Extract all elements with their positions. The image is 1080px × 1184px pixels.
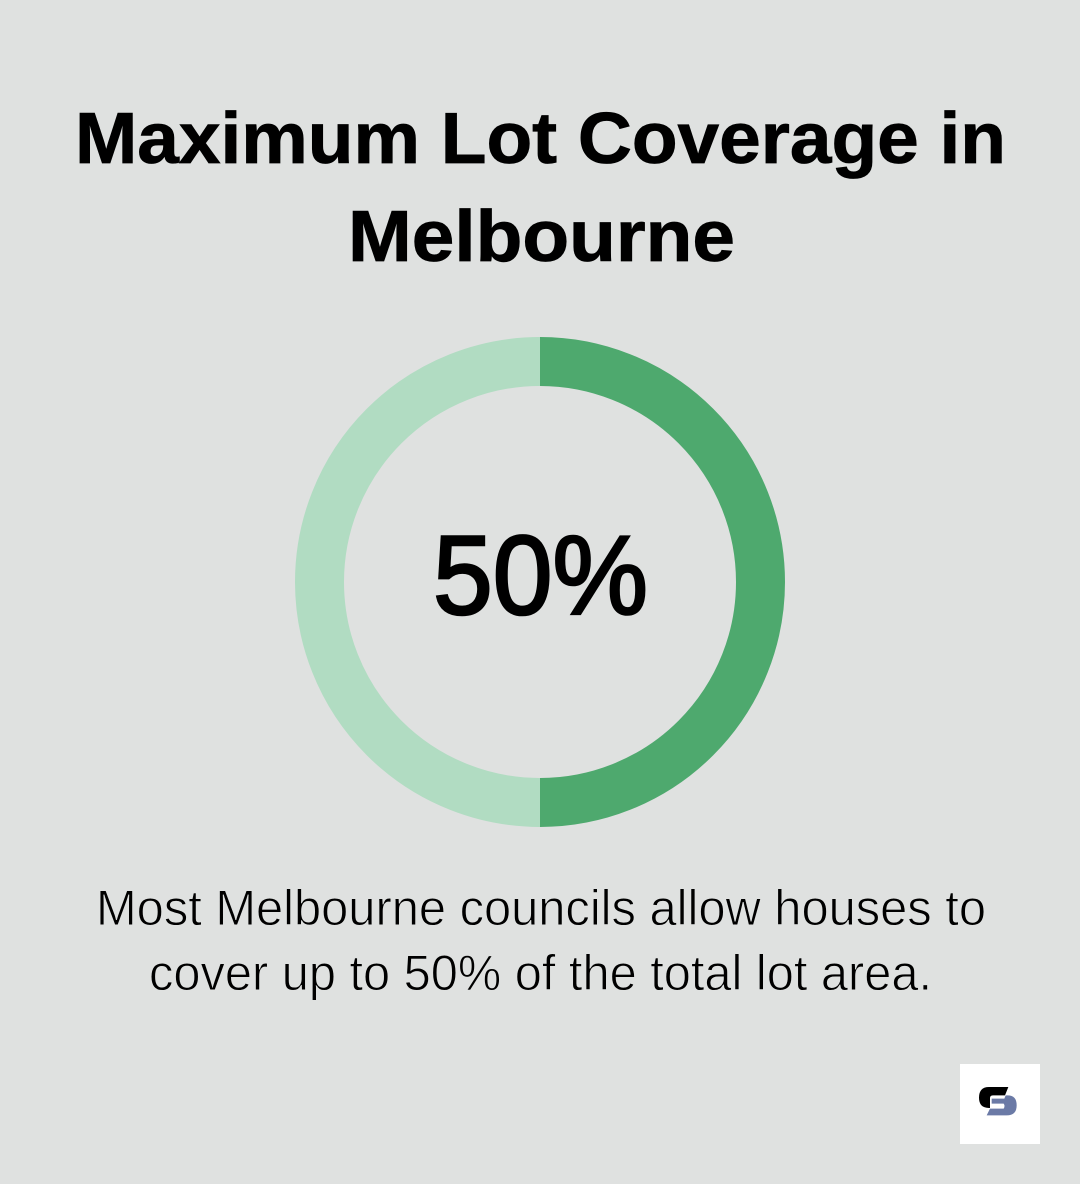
logo mark — [979, 1087, 1017, 1115]
title: Maximum Lot Coverage in — [75, 99, 1006, 179]
donut value segment — [540, 362, 760, 802]
title: Melbourne — [348, 197, 735, 277]
donut remainder segment — [320, 362, 540, 802]
description text: cover up to 50% of the total lot area. — [149, 945, 932, 1001]
donut chart: 50% coverage — [320, 362, 760, 802]
description text — [96, 880, 986, 1001]
donut centre value: 50% — [433, 513, 648, 638]
logo mark: black part — [979, 1087, 1008, 1108]
logo badge — [960, 1064, 1040, 1144]
logo mark: blue part — [987, 1095, 1017, 1115]
title — [75, 99, 1006, 277]
description text: Most Melbourne councils allow houses to — [96, 880, 986, 936]
